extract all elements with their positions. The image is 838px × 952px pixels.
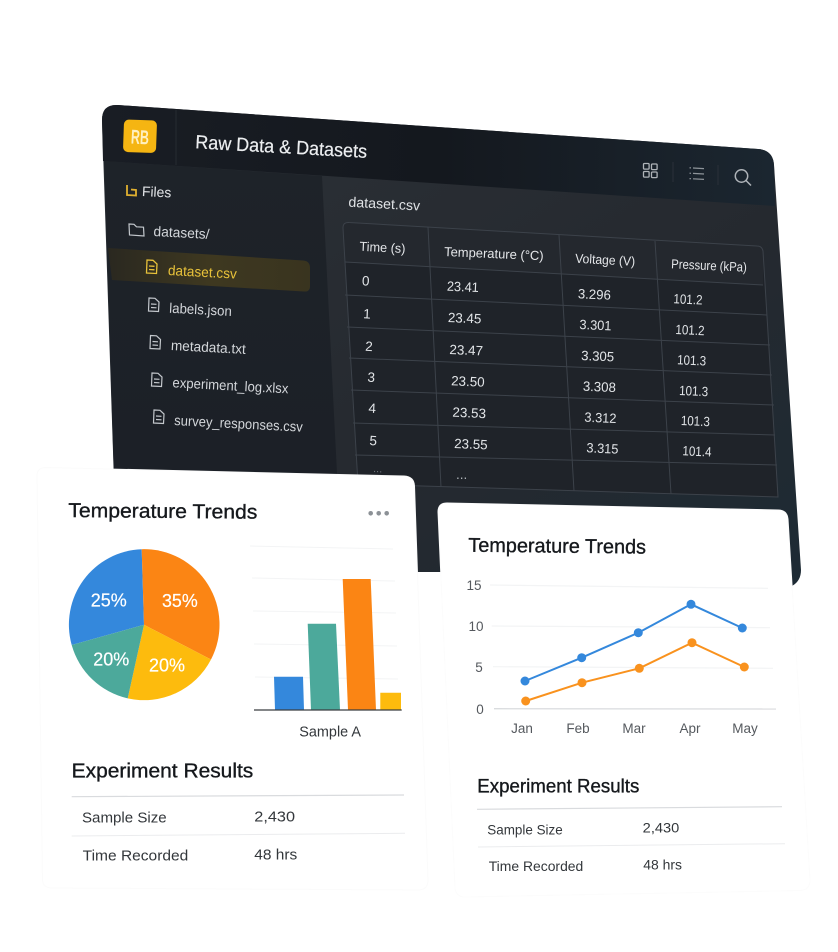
y axis labels: 0 <box>476 702 484 717</box>
icon: grid view <box>644 164 657 178</box>
x axis labels: Feb <box>566 721 590 736</box>
temperature column: ... <box>456 467 467 482</box>
series: blue <box>520 600 747 686</box>
bar chart <box>250 546 402 741</box>
x axis labels <box>511 721 758 736</box>
voltage column: 3.315 <box>586 440 619 457</box>
icon: search <box>735 170 751 186</box>
time column: 2 <box>365 339 373 354</box>
y axis labels <box>466 578 484 717</box>
icon: files <box>127 185 136 196</box>
card background <box>37 468 428 890</box>
pressure column: 101.2 <box>675 322 705 338</box>
time column: 0 <box>362 273 370 289</box>
x axis labels: Jan <box>511 721 533 736</box>
temperature column: 23.53 <box>452 405 486 421</box>
files heading: Files <box>142 183 172 201</box>
icon: file <box>154 410 164 424</box>
data table <box>343 222 778 497</box>
pressure column: 101.2 <box>673 291 703 308</box>
card heading: Temperature Trends <box>68 500 257 524</box>
pie chart: 20% <box>149 656 185 676</box>
pie chart: 20% <box>93 650 129 670</box>
main pane file name: dataset.csv <box>348 194 421 213</box>
voltage column: 3.296 <box>578 286 611 303</box>
logo: RB <box>130 127 149 149</box>
table header labels: Time (s) <box>359 239 406 256</box>
pie chart: 35% <box>162 591 198 611</box>
time column: 1 <box>363 306 371 322</box>
voltage column: 3.308 <box>583 379 616 395</box>
panel: pie and bar card <box>37 468 428 890</box>
window title: Raw Data & Datasets <box>195 132 368 163</box>
file name: survey_responses.csv <box>174 412 303 435</box>
window body <box>102 105 801 586</box>
pressure column: 101.3 <box>681 413 710 429</box>
icon: file <box>148 298 159 312</box>
pie chart <box>69 549 220 700</box>
panel: raw data app window <box>102 105 801 586</box>
icon: list view <box>690 168 704 179</box>
table header labels <box>359 239 747 275</box>
bar chart: Sample A <box>299 724 361 741</box>
line chart <box>466 578 776 736</box>
results table: Time Recorded <box>489 858 583 874</box>
panel: sidebar <box>104 161 342 572</box>
results table: Time Recorded <box>83 848 188 865</box>
table header labels: Temperature (°C) <box>444 244 544 263</box>
pressure column <box>673 291 712 460</box>
table header row <box>343 222 763 285</box>
file name: labels.json <box>169 300 232 319</box>
temperature column: 23.50 <box>451 373 485 390</box>
temperature column <box>447 279 488 482</box>
icon: selected file <box>146 260 157 274</box>
icon: more menu <box>368 511 389 516</box>
table header labels: Pressure (kPa) <box>671 256 747 275</box>
icon: file <box>150 336 160 349</box>
card heading: Temperature Trends <box>468 535 646 559</box>
folder name: datasets/ <box>153 223 210 242</box>
files sidebar list <box>108 183 310 435</box>
x axis labels: Mar <box>622 721 646 736</box>
results table <box>477 807 785 874</box>
file name: experiment_log.xlsx <box>172 374 289 396</box>
temperature column: 23.45 <box>448 310 482 326</box>
results table: 48 hrs <box>643 856 682 872</box>
x axis labels: May <box>732 721 758 736</box>
y axis labels: 15 <box>466 578 482 593</box>
voltage column: 3.312 <box>584 410 617 426</box>
panel: line chart card <box>438 503 810 897</box>
icon: folder <box>129 224 144 236</box>
voltage column: 3.301 <box>579 317 612 333</box>
results table: Sample Size <box>82 810 167 827</box>
time column: ... <box>373 463 383 475</box>
voltage column <box>578 286 619 457</box>
results table: Sample Size <box>487 821 563 837</box>
x axis labels: Apr <box>679 721 701 736</box>
card background <box>438 503 810 897</box>
results table <box>72 795 405 865</box>
logo <box>123 119 157 153</box>
selected file name: dataset.csv <box>168 262 237 282</box>
pressure column: 101.4 <box>682 443 712 460</box>
file name: metadata.txt <box>171 337 246 357</box>
table header labels: Voltage (V) <box>575 251 636 269</box>
time column: 4 <box>368 401 377 416</box>
temperature column: 23.41 <box>447 279 479 295</box>
series: orange <box>521 638 749 706</box>
toolbar icons <box>644 162 751 186</box>
results table: 2,430 <box>254 809 295 826</box>
pie chart: 25% <box>91 591 127 611</box>
results heading: Experiment Results <box>477 777 639 798</box>
table background <box>343 222 778 497</box>
icon: file <box>152 373 162 386</box>
temperature column: 23.55 <box>454 436 488 452</box>
voltage column: 3.305 <box>581 348 614 364</box>
header bar <box>102 105 775 206</box>
time column: 3 <box>367 370 375 385</box>
y axis labels: 5 <box>475 660 483 675</box>
results table: 48 hrs <box>254 846 297 863</box>
pressure column: 101.3 <box>677 352 706 369</box>
y axis labels: 10 <box>468 619 484 634</box>
time column <box>362 273 383 475</box>
results heading: Experiment Results <box>72 760 253 782</box>
temperature column: 23.47 <box>449 342 483 358</box>
table grid lines <box>343 222 778 497</box>
time column: 5 <box>369 433 377 448</box>
selected file highlight <box>108 248 310 292</box>
pressure column: 101.3 <box>679 383 708 399</box>
results table: 2,430 <box>643 820 680 836</box>
